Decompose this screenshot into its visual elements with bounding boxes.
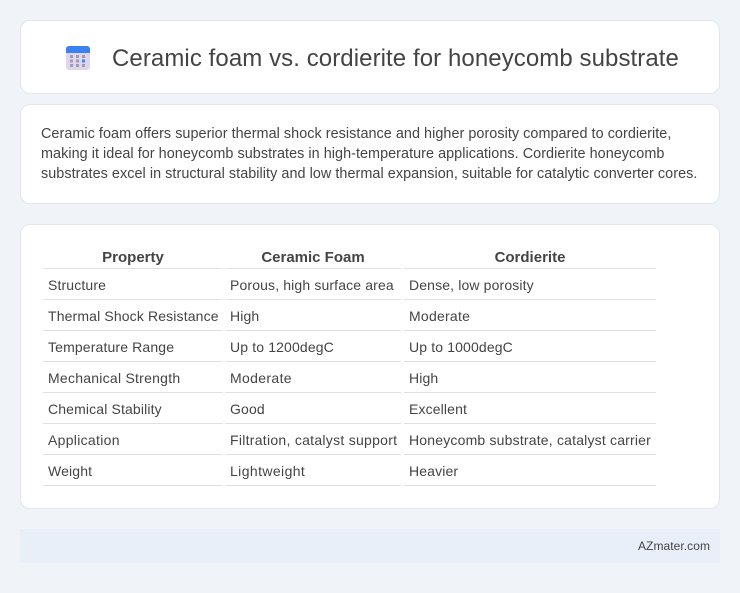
row: Structure: Porous, high surface area	[230, 277, 394, 293]
row: Temperature Range: Temperature Range	[48, 339, 174, 355]
row: Temperature Range: Up to 1200degC	[230, 339, 334, 355]
row: Chemical Stability: Excellent	[409, 401, 467, 417]
row: Thermal Shock Resistance	[48, 308, 470, 324]
panel: comparison table	[20, 224, 720, 509]
row: Thermal Shock Resistance: Moderate	[409, 308, 470, 324]
row: Application: Honeycomb substrate, catalyst carrier	[409, 432, 651, 448]
summary text	[41, 126, 697, 182]
header: Property: Property	[102, 249, 164, 266]
row: Application	[48, 432, 651, 448]
row: Chemical Stability: Good	[230, 401, 265, 417]
summary text: making it ideal for honeycomb substrates in high-temperature applications. Cordierite honeycomb	[41, 146, 664, 162]
row: Mechanical Strength: Moderate	[230, 370, 292, 386]
row: Structure: Dense, low porosity	[409, 277, 534, 293]
row: Chemical Stability	[48, 401, 467, 417]
footer bar	[20, 529, 720, 563]
row: Structure	[48, 277, 534, 293]
row: Temperature Range: Up to 1000degC	[409, 339, 513, 355]
summary text: Ceramic foam offers superior thermal shock resistance and higher porosity compared to cordierite,	[41, 126, 671, 142]
row: Weight: Heavier	[409, 463, 458, 479]
icon: calendar grid	[66, 46, 90, 70]
row: Structure: Structure	[48, 277, 106, 293]
row: Weight: Lightweight	[230, 463, 305, 479]
row: Mechanical Strength: Mechanical Strength	[48, 370, 180, 386]
header: Cordierite: Cordierite	[495, 249, 565, 266]
row: Weight: Weight	[48, 463, 92, 479]
panel: summary	[20, 104, 720, 204]
row: Application: Application	[48, 432, 120, 448]
row: Application: Filtration, catalyst support	[230, 432, 397, 448]
row: Thermal Shock Resistance: High	[230, 308, 259, 324]
row: Thermal Shock Resistance: Thermal Shock Resistance	[48, 308, 219, 324]
row: Weight	[48, 463, 458, 479]
header: Ceramic Foam: Ceramic Foam	[261, 249, 365, 266]
row: Chemical Stability: Chemical Stability	[48, 401, 162, 417]
summary text: substrates excel in structural stability and low thermal expansion, suitable for catalytic converter cores.	[41, 166, 697, 182]
panel: title card	[20, 20, 720, 94]
footer credit: AZmater.com	[638, 539, 710, 553]
title: Ceramic foam vs. cordierite for honeycomb substrate	[112, 45, 679, 72]
row: Mechanical Strength: High	[409, 370, 438, 386]
row: Mechanical Strength	[48, 370, 438, 386]
row: Temperature Range	[48, 339, 513, 355]
